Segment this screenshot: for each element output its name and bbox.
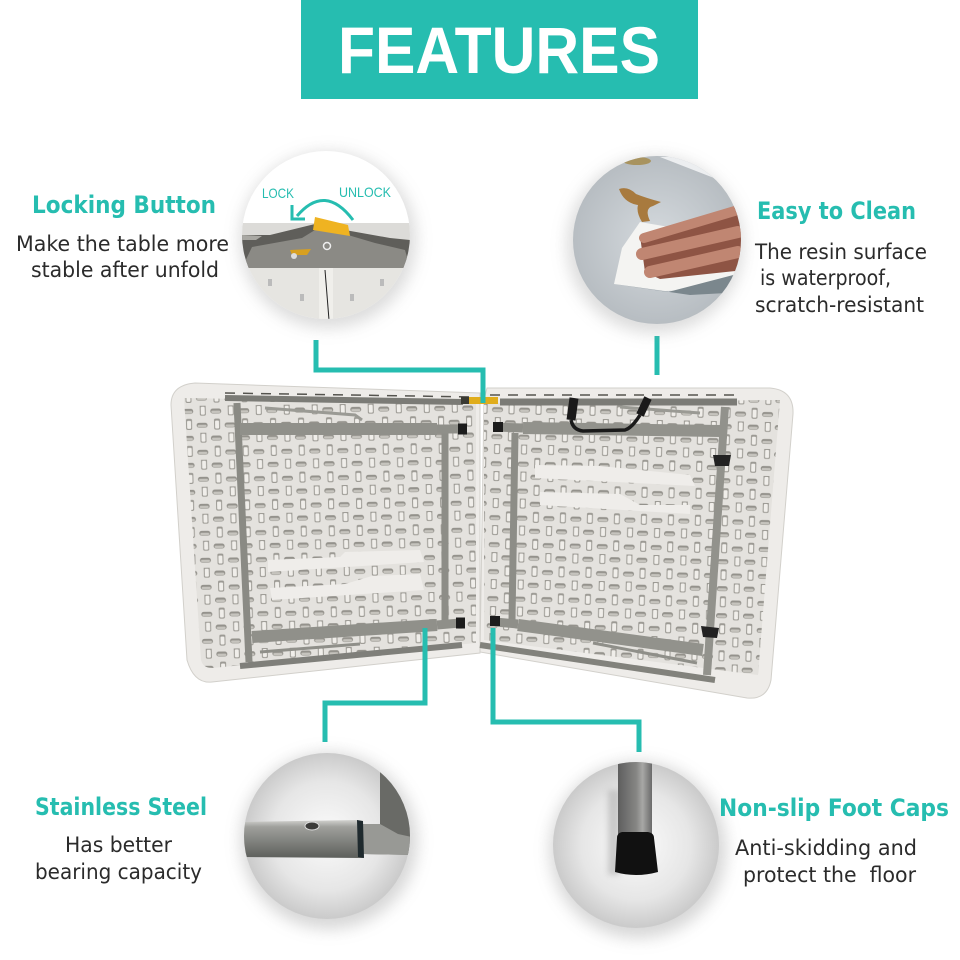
callout photo: locking button: LOCK <box>262 185 295 201</box>
tissue <box>614 222 745 291</box>
callout photo: stainless steel <box>241 753 417 929</box>
callout text: locking button: Make the table more <box>16 232 229 256</box>
callout photo: locking button: UNLOCK <box>339 184 392 200</box>
callout photo: locking button <box>240 151 416 328</box>
yellow lever <box>313 217 350 236</box>
edge notches <box>225 393 475 397</box>
connector line: foot caps <box>493 628 639 752</box>
callout photo: non-slip foot caps <box>550 760 726 938</box>
hand <box>640 205 745 279</box>
callout text: easy to clean: scratch-resistant <box>755 293 924 317</box>
callout text: locking button: stable after unfold <box>31 258 219 282</box>
callout text: non-slip foot caps: protect the floor <box>743 863 916 887</box>
title banner: FEATURES <box>338 13 660 87</box>
callout text: easy to clean <box>754 197 927 317</box>
callout text: stainless steel <box>35 793 207 884</box>
left frame tubes <box>225 398 467 666</box>
callout text: easy to clean: The resin surface <box>754 240 927 264</box>
spill stain <box>619 188 661 222</box>
callout text: stainless steel: Has better <box>65 833 172 857</box>
callout text: stainless steel: bearing capacity <box>35 860 202 884</box>
title banner <box>301 0 698 99</box>
callout text: locking button: Locking Button <box>32 191 216 219</box>
callout photo: easy to clean <box>567 156 745 333</box>
callout text: locking button <box>16 191 229 282</box>
rubber foot cap <box>615 832 658 875</box>
connector line: easy to clean <box>654 336 660 375</box>
right table half <box>480 388 793 698</box>
callout text: non-slip foot caps: Anti-skidding and <box>735 836 917 860</box>
folded table underside <box>171 383 793 698</box>
left table half <box>171 383 480 682</box>
connector line: locking button <box>316 340 483 403</box>
right frame tubes <box>480 402 737 680</box>
lock arrow <box>292 200 353 220</box>
yellow hinge lock <box>461 397 498 404</box>
edge notches <box>490 394 735 396</box>
connector line: stainless steel <box>325 628 425 742</box>
callout text: stainless steel: Stainless Steel <box>35 793 207 821</box>
frame clips <box>701 455 731 638</box>
callout text: easy to clean: Easy to Clean <box>757 197 916 225</box>
callout text: non-slip foot caps <box>719 794 949 887</box>
carry handle <box>571 398 648 431</box>
callout text: easy to clean: is waterproof, <box>760 266 891 290</box>
